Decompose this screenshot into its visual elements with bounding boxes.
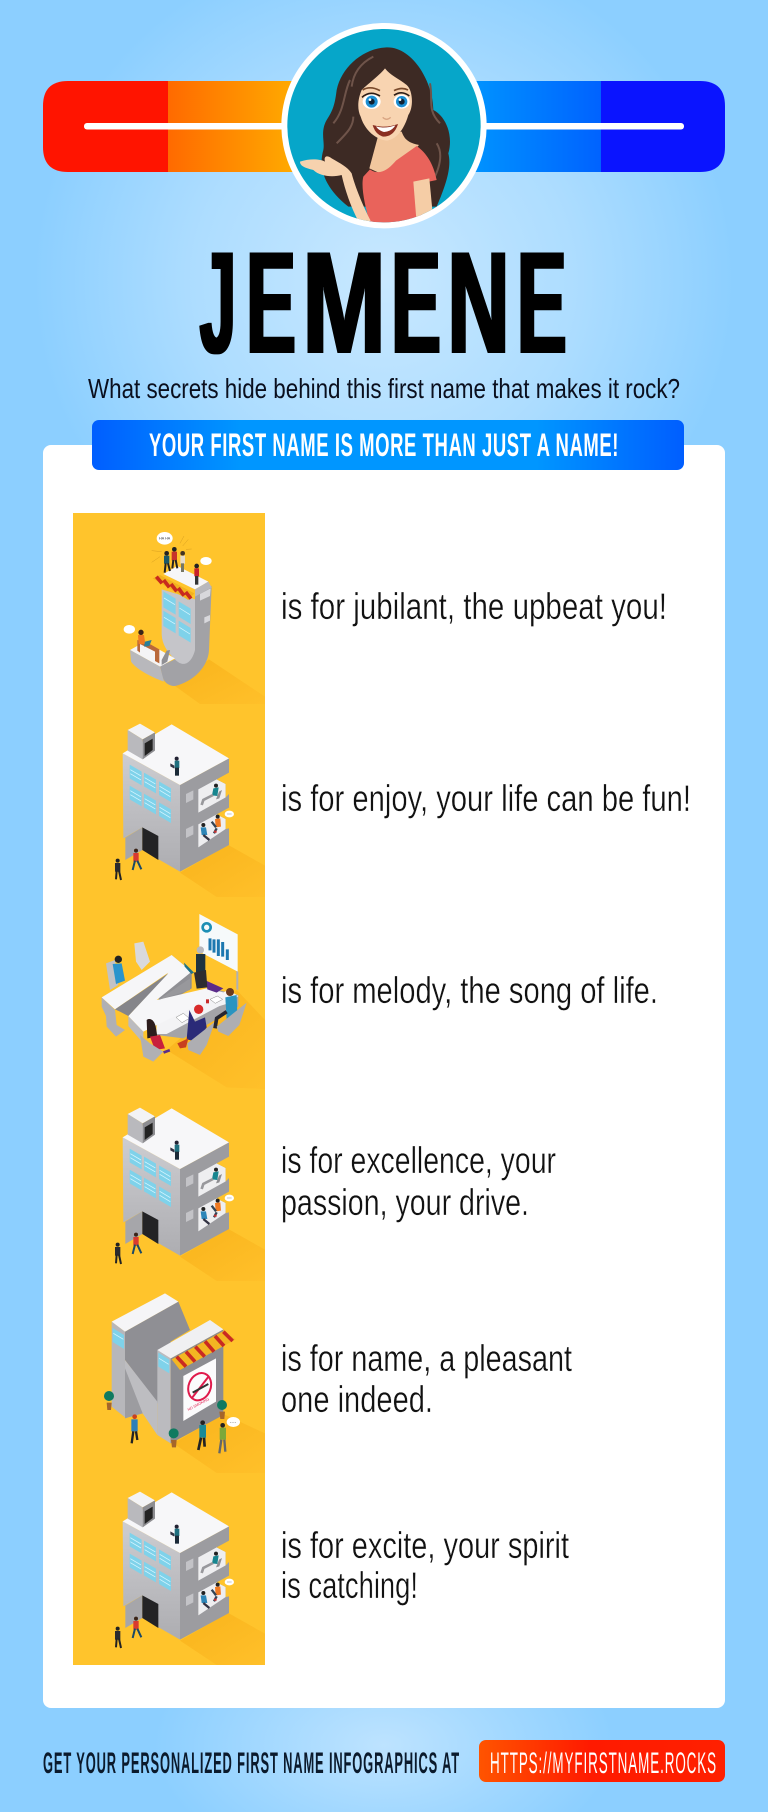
title: E bbox=[517, 221, 567, 384]
banner bbox=[92, 420, 684, 470]
header ribbon bbox=[43, 81, 725, 172]
text: N bbox=[281, 1338, 573, 1420]
text: E excellence bbox=[281, 1140, 556, 1223]
text: N: one indeed. bbox=[281, 1379, 433, 1420]
text: M: is for melody, the song of life. bbox=[281, 970, 658, 1011]
text: N: is for name, a pleasant bbox=[281, 1338, 573, 1379]
text: J: is for jubilant, the upbeat you! bbox=[281, 586, 667, 627]
icon: letter E building, row 6 bbox=[115, 1492, 265, 1665]
title: M bbox=[302, 221, 386, 384]
text: E excite: is for excite, your spirit bbox=[281, 1525, 570, 1566]
ribbon: warm left side bbox=[43, 81, 298, 172]
panel: card background bbox=[43, 445, 725, 1708]
panel: yellow illustration column bbox=[73, 513, 265, 1665]
icon: letter N building bbox=[104, 1293, 265, 1473]
icon: letter E building, row 4 bbox=[115, 1108, 265, 1281]
ribbon: cool right side bbox=[470, 81, 725, 172]
icon: letter M meeting table bbox=[102, 914, 265, 1089]
text: E excite: is catching! bbox=[281, 1565, 418, 1606]
icon: letter J building: HA HA bbox=[159, 537, 171, 541]
ribbon: white line bbox=[84, 123, 684, 130]
icon: letter E building, row 2 bbox=[115, 724, 265, 897]
text: E excellence: passion, your drive. bbox=[281, 1182, 529, 1223]
icon: letter J building bbox=[124, 532, 265, 704]
text: E excite bbox=[281, 1525, 570, 1606]
title: J bbox=[200, 221, 236, 384]
title: N bbox=[448, 221, 510, 384]
footer url button bbox=[479, 1740, 725, 1782]
title: E bbox=[246, 221, 296, 384]
avatar portrait bbox=[281, 23, 487, 228]
icon: letter N building: NO SMOKING bbox=[187, 1397, 210, 1412]
title: E bbox=[391, 221, 441, 384]
text: E excellence: is for excellence, your bbox=[281, 1140, 556, 1181]
